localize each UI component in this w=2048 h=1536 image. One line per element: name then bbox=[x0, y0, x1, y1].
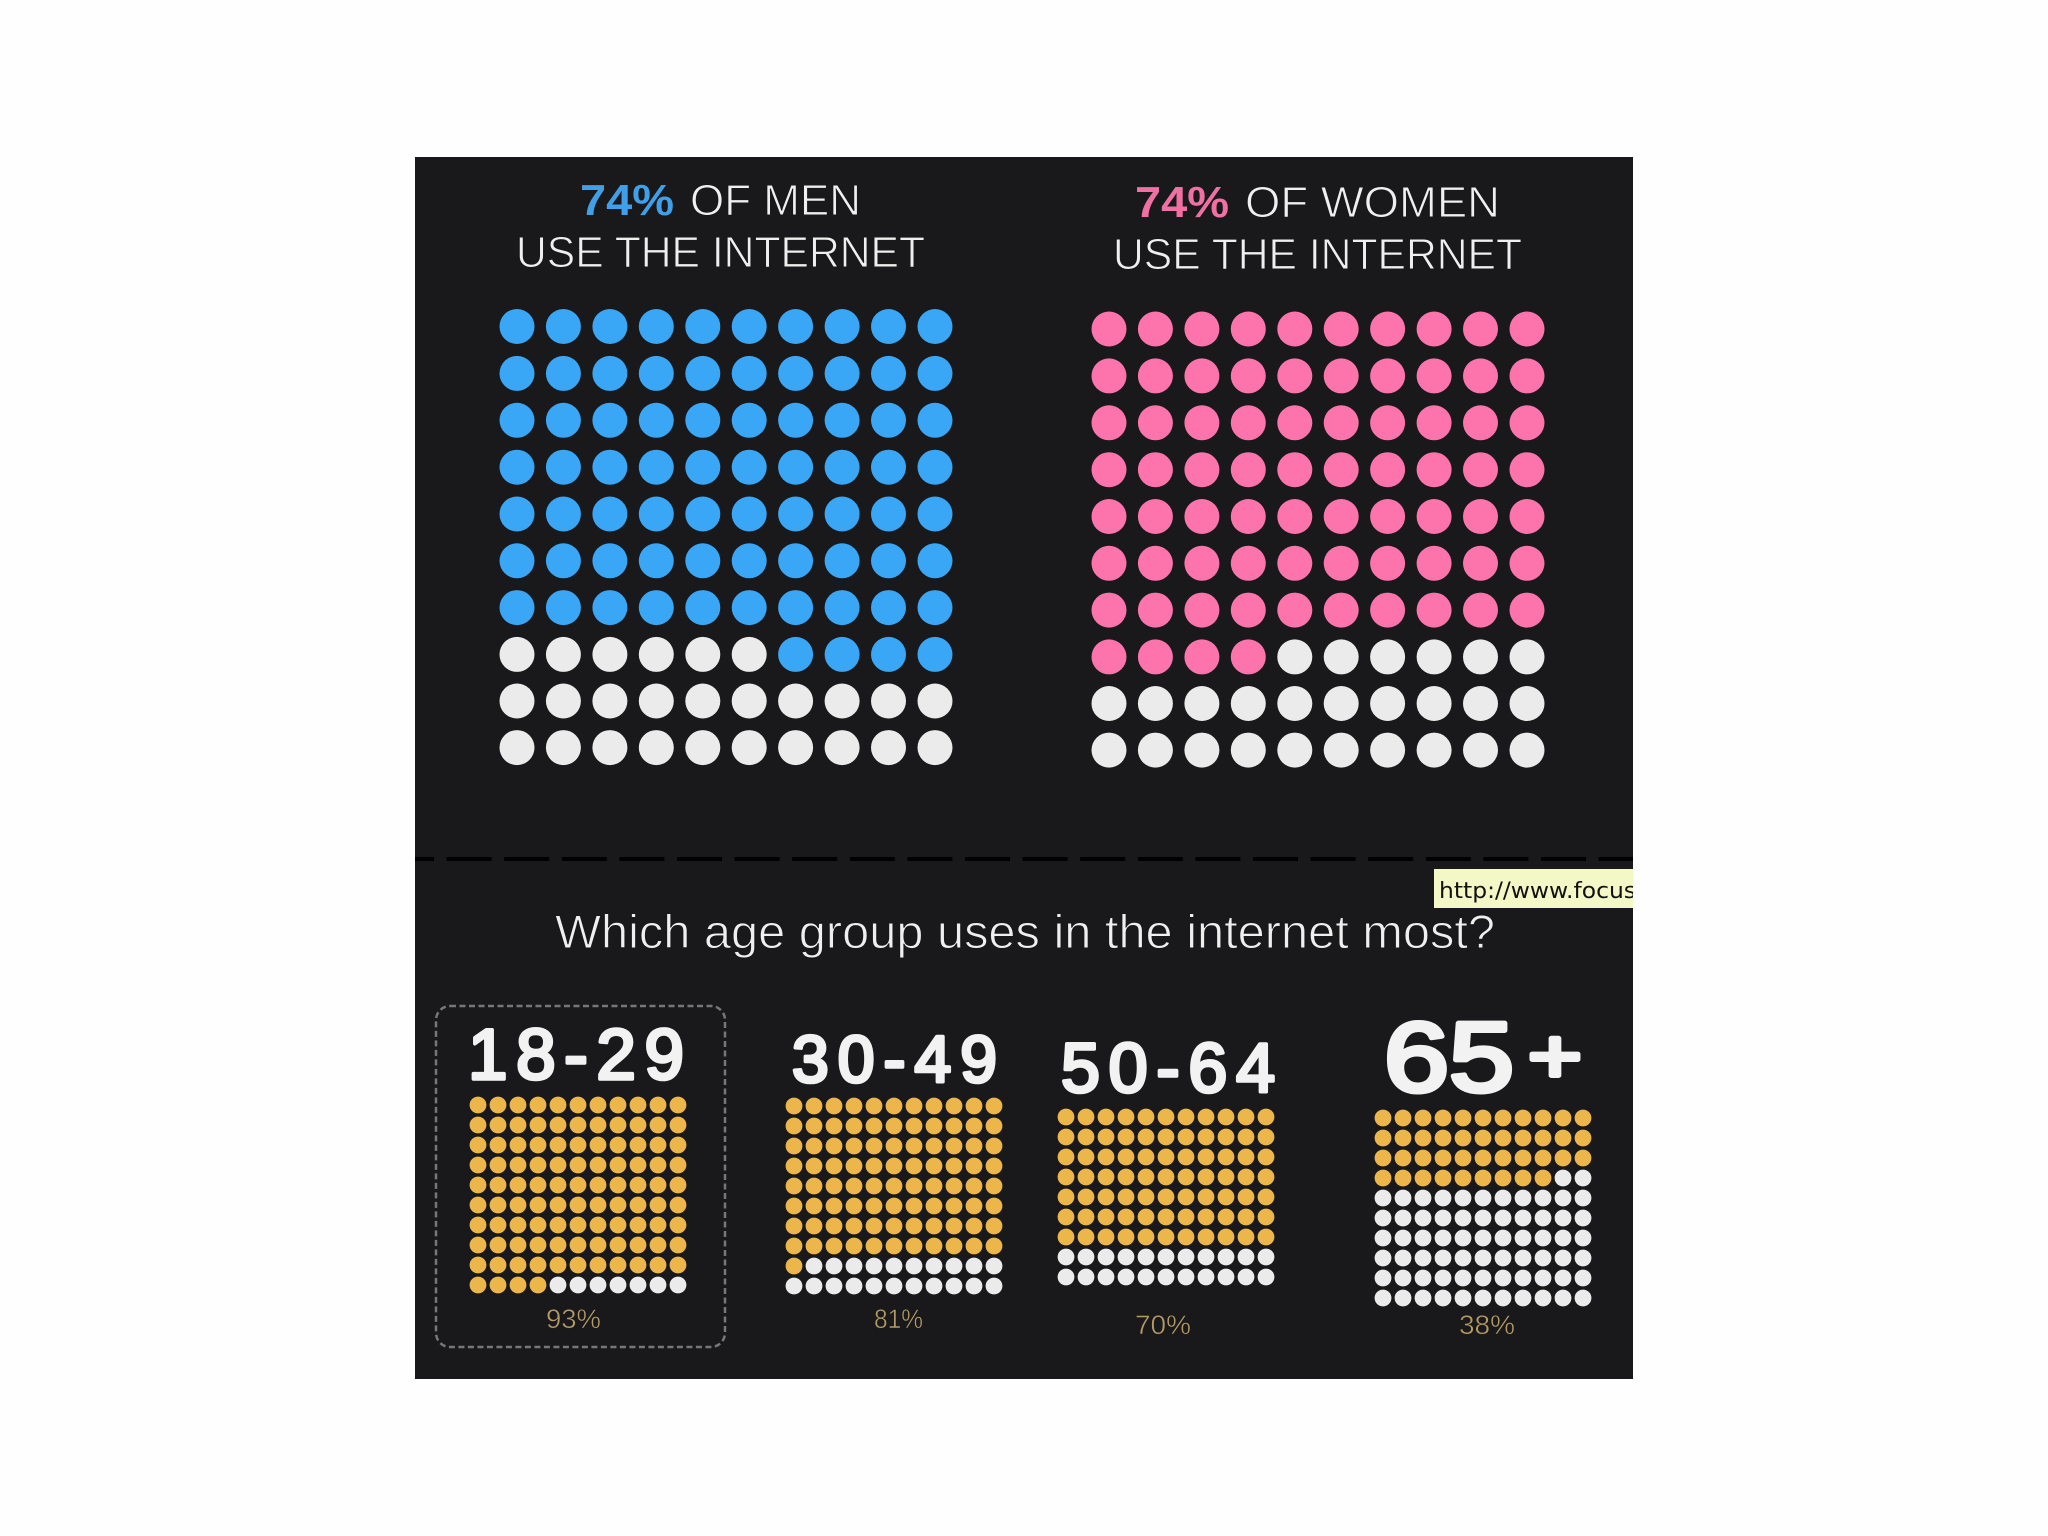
age group: 65+ bbox=[1375, 1002, 1591, 1340]
heading: 74% of men bbox=[516, 176, 925, 277]
percent label: 70% bbox=[1135, 1310, 1191, 1340]
percent label: 81% bbox=[874, 1304, 923, 1334]
heading: 74% of men: OF MEN bbox=[690, 176, 861, 225]
age group: 50-64 bbox=[1058, 1029, 1275, 1340]
heading: 74% of women: USE THE INTERNET bbox=[1113, 230, 1522, 279]
age group: 50-64: 50-64 bbox=[1061, 1029, 1275, 1107]
percent label: 38% bbox=[1459, 1310, 1515, 1340]
dot chart: men 74 of 100 bbox=[500, 309, 952, 765]
dot chart: 81% bbox=[786, 1098, 1002, 1294]
heading: 74% of women bbox=[1113, 178, 1522, 279]
age group: 18-29: 18-29 bbox=[468, 1016, 684, 1095]
dot chart: 38% bbox=[1375, 1110, 1591, 1306]
percent label: 93% bbox=[546, 1304, 601, 1334]
age group: 30-49 bbox=[786, 1022, 1002, 1334]
dot chart: 70% bbox=[1058, 1109, 1274, 1285]
highlight box: 18-29 bbox=[436, 1006, 725, 1347]
heading: 74% of women: 74% bbox=[1135, 178, 1229, 227]
question heading: Which age group uses in the internet most? bbox=[555, 905, 1495, 958]
browser tooltip: http://www.focus bbox=[1439, 879, 1636, 904]
age group: 30-49: 30-49 bbox=[792, 1022, 997, 1096]
browser tooltip bbox=[1434, 869, 1636, 908]
heading: 74% of men: 74% bbox=[580, 176, 674, 225]
heading: 74% of men: USE THE INTERNET bbox=[516, 228, 925, 277]
dot chart: women 74 of 100 bbox=[1092, 312, 1544, 768]
age group: 18-29 bbox=[468, 1016, 686, 1334]
heading: 74% of women: OF WOMEN bbox=[1245, 178, 1500, 227]
age group: 65+: 65 bbox=[1384, 1002, 1514, 1112]
age group: 65+: + bbox=[1528, 1014, 1582, 1099]
dot chart: 93% bbox=[470, 1097, 686, 1293]
